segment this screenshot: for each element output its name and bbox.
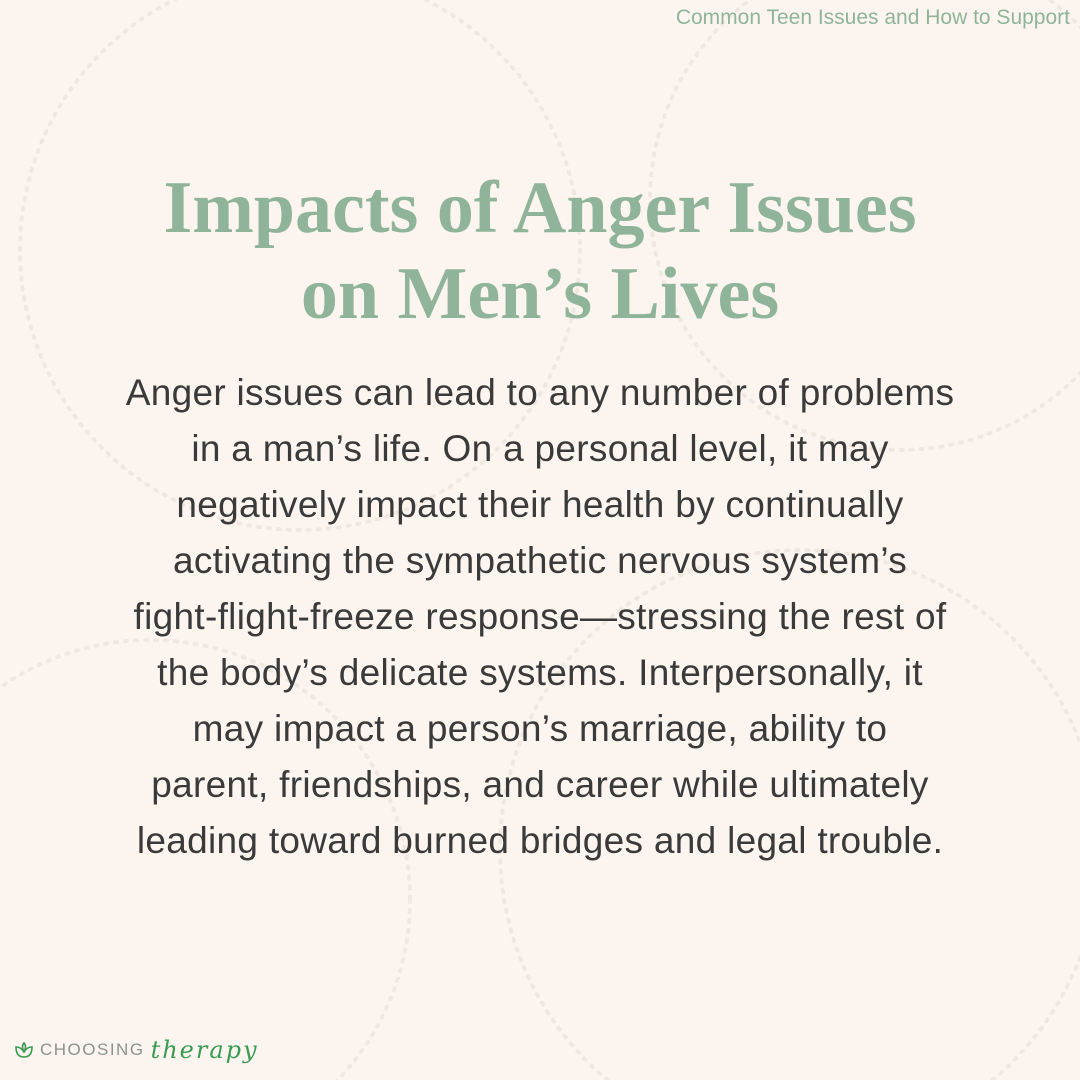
title [163, 167, 917, 335]
body text: leading toward burned bridges and legal trouble. [137, 820, 943, 861]
body text: activating the sympathetic nervous system’s [173, 540, 907, 581]
title: Impacts of Anger Issues [163, 167, 917, 249]
body text: may impact a person’s marriage, ability to [193, 708, 887, 749]
body text: in a man’s life. On a personal level, it may [191, 428, 889, 469]
logo: therapy [151, 1036, 259, 1064]
header text: Common Teen Issues and How to Support [676, 6, 1070, 29]
body text: Anger issues can lead to any number of problems [126, 372, 954, 413]
body text: fight-flight-freeze response—stressing the rest of [134, 596, 946, 637]
body text [126, 372, 954, 861]
body text: negatively impact their health by continually [176, 484, 904, 525]
logo [15, 1036, 259, 1064]
body text: parent, friendships, and career while ultimately [151, 764, 929, 805]
body text: the body’s delicate systems. Interpersonally, it [157, 652, 923, 693]
icon: leaf [15, 1042, 33, 1058]
logo: CHOOSING [40, 1040, 145, 1059]
title: on Men’s Lives [301, 253, 779, 335]
